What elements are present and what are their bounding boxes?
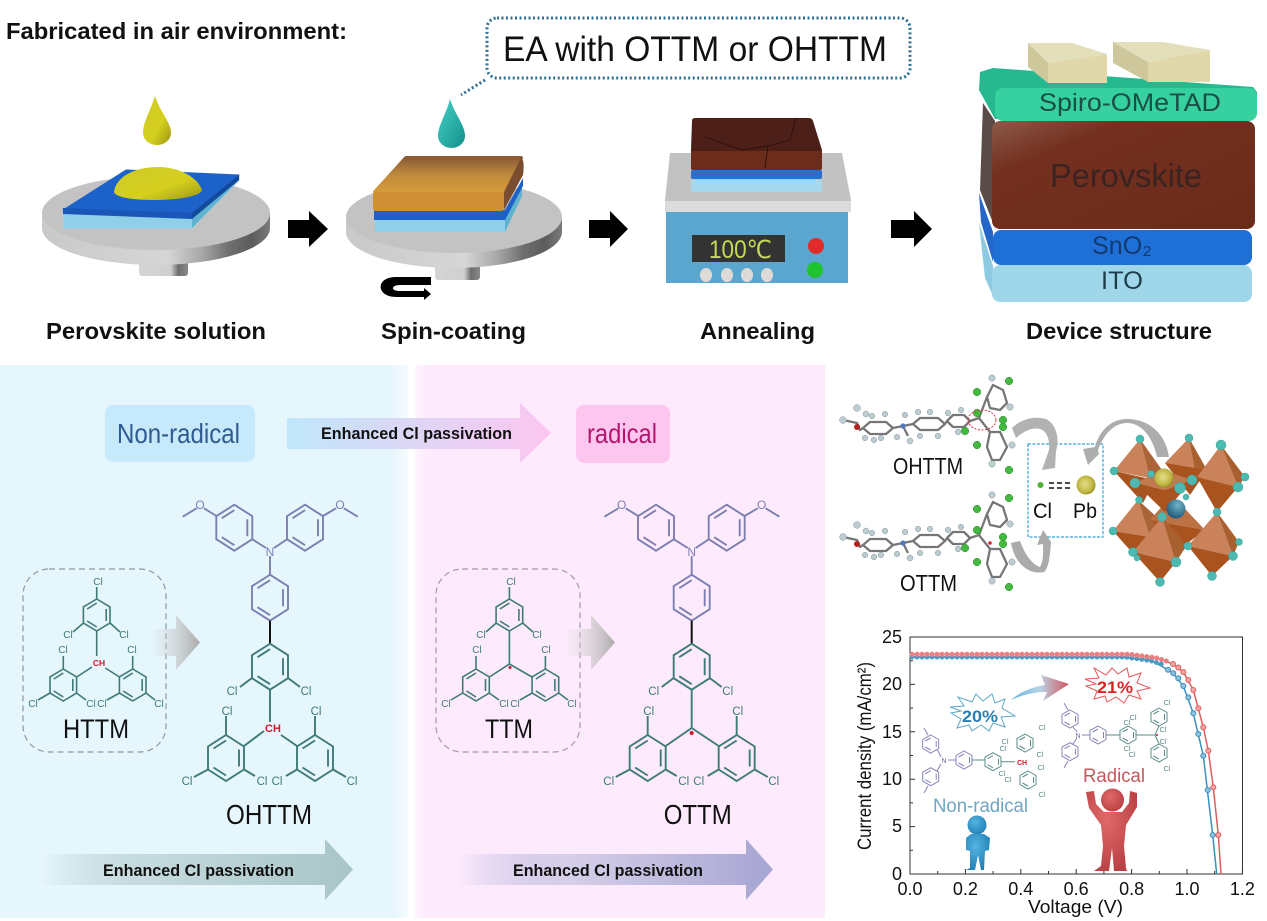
molecule: non-radical inset: Cl	[999, 744, 1007, 753]
illustration: annealing hot plate	[665, 118, 851, 283]
label: Perovskite: Perovskite	[1050, 157, 1202, 194]
molecule: OHTTM: Cl	[272, 776, 282, 788]
step label: device structure: Device structure	[1026, 318, 1212, 344]
arrow: TTM to OTTM	[568, 615, 615, 670]
arrow: OTTM to Cl	[1011, 530, 1051, 573]
molecule: HTTM: Cl	[127, 645, 137, 656]
molecule: OTTM: Cl	[768, 776, 779, 788]
molecule: OHTTM: Cl	[182, 776, 192, 788]
molecule: TTM: Cl	[567, 699, 577, 710]
molecule: radical inset: Cl	[1159, 737, 1167, 746]
molecule: non-radical inset: Cl	[1038, 723, 1046, 732]
x tick labels: 0.4	[1008, 879, 1033, 899]
molecule: HTTM: Cl	[93, 577, 103, 588]
molecule: radical inset: Cl	[1128, 750, 1136, 759]
label: radical: Radical	[1083, 766, 1145, 787]
molecule: HTTM: Cl	[119, 630, 129, 641]
x tick labels: 0.6	[1064, 879, 1089, 899]
arrow: OHTTM to Cl	[1012, 418, 1058, 470]
molecule: OHTTM: N	[266, 545, 274, 559]
molecule: OHTTM: Cl	[257, 776, 267, 788]
ball-and-stick: OHTTM	[840, 375, 1015, 474]
label: Spiro-OMeTAD: Spiro-OMeTAD	[1039, 89, 1221, 117]
x tick labels: 0.0	[897, 879, 923, 899]
molecule: radical inset: Cl	[1163, 764, 1171, 773]
arrow: process 3	[891, 211, 932, 247]
molecule: TTM: Cl	[532, 630, 542, 641]
molecule: non-radical inset: Cl	[1037, 763, 1045, 772]
x tick labels: 0.8	[1119, 879, 1144, 899]
panel: passivation mechanism	[840, 375, 1249, 596]
molecule: non-radical inset: Cl	[1036, 750, 1044, 759]
molecule: HTTM: HTTM	[63, 714, 129, 744]
molecule: OHTTM	[182, 498, 358, 830]
molecule: TTM	[436, 569, 580, 752]
molecule: non-radical inset: N	[941, 758, 947, 765]
y tick labels: 5	[892, 816, 902, 836]
label: OHTTM: OHTTM	[893, 453, 963, 479]
arrow: efficiency improvement	[1011, 675, 1069, 701]
arrow: enhanced Cl passivation top: Enhanced Cl passivation	[321, 424, 512, 443]
y tick labels	[882, 627, 902, 884]
molecule: HTTM: Cl	[58, 645, 68, 656]
molecule: HTTM	[23, 569, 166, 752]
label: OTTM: OTTM	[900, 570, 957, 596]
step label: spin-coating: Spin-coating	[381, 318, 526, 344]
molecule: TTM: Cl	[541, 645, 551, 656]
molecule: non-radical inset: Cl	[1038, 790, 1046, 799]
illustration: perovskite solution on spin coater	[42, 96, 270, 276]
molecule: radical inset: N	[1075, 733, 1081, 740]
molecule: non-radical inset: Cl	[1001, 737, 1009, 746]
molecule: OTTM: OTTM	[664, 799, 732, 830]
molecule: non-radical inset	[923, 723, 1046, 799]
molecule: TTM: TTM	[485, 714, 533, 744]
molecule: OHTTM: Cl	[222, 706, 232, 718]
crystal: perovskite octahedra	[1109, 434, 1249, 586]
molecule: non-radical inset: CH	[1017, 760, 1027, 767]
badge: 20%: 20%	[962, 707, 998, 726]
display: 100 degrees: 100℃	[709, 236, 772, 264]
label: SnO2: SnO₂	[1092, 232, 1152, 260]
molecule: OTTM: Cl	[678, 776, 689, 788]
arrow: enhanced Cl passivation top	[287, 403, 551, 463]
molecule: HTTM: Cl	[63, 630, 73, 641]
y tick labels: 25	[882, 627, 902, 647]
molecule: OHTTM: Cl	[311, 706, 321, 718]
icon: teal drop	[438, 99, 465, 148]
y tick labels: 10	[882, 769, 902, 789]
molecule: radical inset: Cl	[1123, 744, 1131, 753]
axis title: current density: Current density (mA/cm²)	[855, 662, 876, 850]
molecule: OHTTM: Cl	[347, 776, 357, 788]
molecule: HTTM: Cl	[97, 699, 107, 710]
ball-and-stick: OTTM	[840, 492, 1015, 591]
callout: EA with OTTM or OHTTM	[461, 18, 910, 95]
box: Cl-Pb interaction: Cl	[1033, 500, 1052, 523]
molecule: TTM: Cl	[506, 577, 516, 588]
curve: radical	[910, 654, 1221, 874]
arrow: enhanced Cl passivation pink panel: Enhanced Cl passivation	[513, 861, 703, 880]
tag: radical	[576, 405, 670, 463]
molecule: OTTM: N	[687, 545, 696, 559]
molecule: OHTTM: O	[335, 498, 345, 512]
tag: non-radical	[105, 405, 255, 462]
molecule: OHTTM: OHTTM	[226, 799, 312, 830]
molecule: HTTM: Cl	[154, 699, 164, 710]
molecule: radical inset: Cl	[1129, 713, 1137, 722]
molecule: OHTTM: Cl	[227, 686, 237, 698]
molecule: OTTM: Cl	[648, 686, 659, 698]
gold electrode right	[1113, 42, 1210, 82]
molecule: radical inset	[1062, 698, 1171, 773]
y tick labels: 0	[892, 864, 902, 884]
molecule: OTTM: O	[617, 498, 626, 512]
y tick labels: 20	[882, 674, 902, 694]
molecule: HTTM: Cl	[28, 699, 38, 710]
molecule: non-radical inset: Cl	[1004, 775, 1012, 784]
molecule: OTTM	[603, 498, 779, 830]
y tick labels: 15	[882, 722, 902, 742]
box: Cl-Pb interaction: Pb	[1073, 500, 1097, 523]
molecule: TTM: Cl	[499, 699, 509, 710]
arrow: enhanced Cl passivation blue panel: Enhanced Cl passivation	[103, 861, 294, 880]
x tick labels: 0.2	[953, 879, 978, 899]
step label: annealing: Annealing	[700, 318, 815, 344]
molecule: OHTTM: Cl	[301, 686, 311, 698]
figure: blue small person	[966, 816, 990, 870]
molecule: OTTM: O	[757, 498, 766, 512]
molecule: OTTM: Cl	[722, 686, 733, 698]
molecule: radical inset: Cl	[1123, 718, 1131, 727]
molecule: non-radical inset: Cl	[998, 769, 1006, 778]
x tick labels: 1.0	[1174, 879, 1200, 899]
molecule: TTM: Cl	[472, 645, 482, 656]
icon: rotation arrow	[381, 277, 431, 300]
curve: non-radical	[910, 657, 1217, 874]
panel: radical background	[415, 365, 825, 918]
badge: 21%	[1085, 668, 1150, 703]
molecule: OHTTM: O	[195, 498, 205, 512]
heading: fabricated in air: Fabricated in air environment:	[6, 18, 347, 44]
molecule: OHTTM: CH	[265, 723, 281, 735]
molecule: TTM: Cl	[441, 699, 451, 710]
illustration: spin coating	[346, 99, 562, 300]
badge: 20%	[950, 694, 1015, 731]
molecule: OTTM: Cl	[693, 776, 704, 788]
label: non-radical: Non-radical	[933, 796, 1028, 817]
arrow: enhanced Cl passivation pink panel	[458, 839, 773, 900]
x tick labels	[897, 879, 1255, 899]
molecule: TTM: Cl	[476, 630, 486, 641]
callout: EA with OTTM or OHTTM: EA with OTTM or OHTTM	[503, 30, 887, 69]
tag: non-radical: Non-radical	[117, 418, 240, 449]
molecule: HTTM: CH	[93, 658, 105, 668]
x and y axis ticks	[910, 637, 1242, 874]
gold electrode left	[1028, 43, 1107, 83]
axis title: voltage: Voltage (V)	[1028, 897, 1123, 917]
molecule: radical inset: Cl	[1163, 698, 1171, 707]
arrow: HTTM to OHTTM	[153, 615, 200, 670]
illustration: device structure stack	[979, 42, 1257, 302]
step label: perovskite solution: Perovskite solution	[46, 318, 266, 344]
arrow: perovskite to Pb	[1083, 419, 1169, 465]
label: ITO: ITO	[1101, 267, 1143, 295]
icon: yellow drop	[143, 96, 171, 145]
molecule: OTTM: Cl	[603, 776, 614, 788]
tag: radical: radical	[587, 418, 657, 449]
molecule: HTTM: Cl	[86, 699, 96, 710]
chart: J-V curves	[855, 627, 1255, 917]
arrow: process 2	[589, 211, 628, 247]
x tick labels: 1.2	[1230, 879, 1255, 899]
molecule: TTM: Cl	[510, 699, 520, 710]
badge: 21%: 21%	[1097, 678, 1133, 697]
molecule: OTTM: Cl	[643, 706, 654, 718]
molecule: OTTM: Cl	[732, 706, 743, 718]
box: Cl-Pb interaction	[1028, 444, 1103, 537]
figure: red large person	[1086, 788, 1137, 871]
molecule: radical inset: Cl	[1159, 725, 1167, 734]
arrow: enhanced Cl passivation blue panel	[40, 839, 353, 900]
arrow: process 1	[288, 211, 328, 247]
panel: non-radical background	[0, 365, 408, 918]
